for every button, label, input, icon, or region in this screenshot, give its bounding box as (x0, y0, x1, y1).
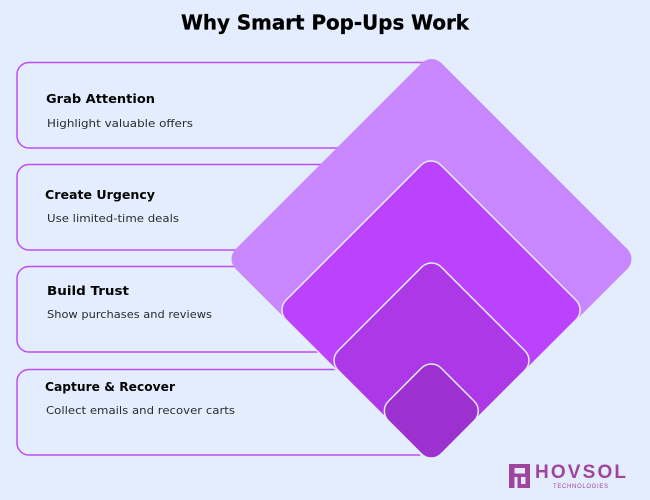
panel: Create Urgency (17, 164, 430, 250)
heading: Build Trust: Build Trust (47, 283, 129, 298)
text: Build Trust description: Show purchases and reviews (47, 309, 212, 321)
panel: Capture & Recover (17, 370, 430, 455)
logo: Hovsol Technologies (509, 462, 626, 490)
panel: Grab Attention (17, 62, 430, 148)
logo wordmark: HOVSOL (535, 462, 626, 483)
diamond: second (276, 155, 586, 465)
heading: Capture & Recover: Capture & Recover (45, 379, 176, 394)
panel: Build Trust (17, 266, 430, 352)
text: Capture & Recover description: Collect emails and recover carts (46, 405, 235, 417)
icon: logo mark (509, 464, 530, 488)
title: Why Smart Pop-Ups Work (181, 10, 470, 34)
diamond: outer (226, 53, 637, 465)
heading: Grab Attention: Grab Attention (46, 91, 155, 106)
text: Create Urgency description: Use limited-time deals (47, 213, 179, 225)
diamond pyramid (226, 53, 637, 465)
text: Grab Attention description: Highlight valuable offers (47, 118, 193, 130)
heading: Create Urgency: Create Urgency (45, 187, 155, 202)
diamond: third (328, 257, 535, 464)
diamond: inner (379, 358, 484, 464)
logo tagline: TECHNOLOGIES (553, 484, 608, 490)
